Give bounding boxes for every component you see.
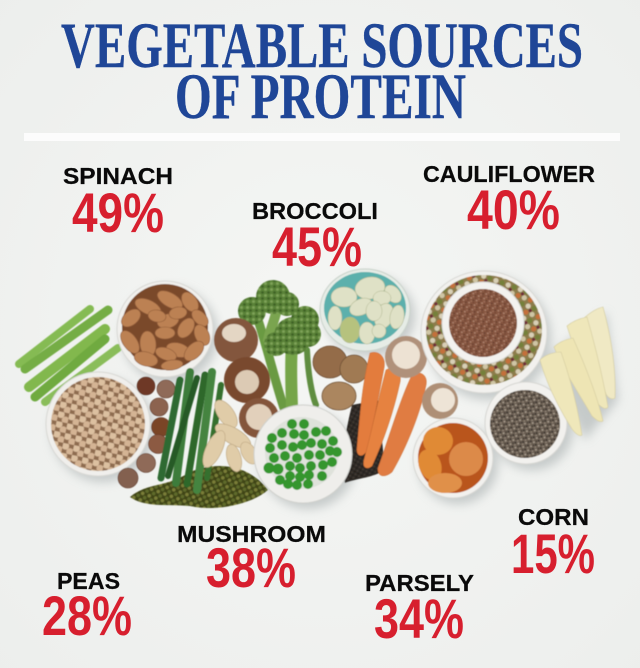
stat: mushroom 38% — [177, 521, 326, 599]
icon: mung beans — [130, 466, 268, 508]
stat: mushroom 38%: MUSHROOM — [177, 521, 326, 547]
stat: broccoli 45%: 45% — [272, 215, 362, 278]
icon: celery sticks — [19, 309, 118, 402]
icon: walnuts — [313, 346, 368, 410]
stat: parsely 34%: 34% — [374, 587, 464, 650]
stat: corn 15% — [511, 504, 595, 585]
stat: corn 15%: CORN — [518, 504, 589, 530]
stat: spinach 49%: 49% — [72, 181, 164, 244]
stat: cauliflower 40%: 40% — [467, 178, 560, 241]
stat: corn 15%: 15% — [511, 522, 595, 585]
stat: cauliflower 40%: CAULIFLOWER — [423, 161, 595, 187]
icon: broad bean bowl — [320, 269, 410, 351]
icon: hazelnuts — [118, 377, 175, 488]
icon: baby corn — [540, 307, 615, 436]
icon: apricot bowl — [413, 418, 493, 498]
icon: peanuts — [198, 396, 261, 473]
stat: spinach 49%: SPINACH — [63, 163, 173, 189]
icon: grains bowl — [421, 271, 547, 393]
icon: peas bowl — [254, 405, 352, 503]
shadows — [51, 275, 618, 509]
icon: black seeds — [343, 400, 385, 483]
stat: peas 28%: PEAS — [57, 568, 120, 594]
stat: broccoli 45% — [252, 198, 378, 278]
title: OF PROTEIN — [175, 61, 466, 133]
stat: broccoli 45%: BROCCOLI — [252, 198, 378, 224]
stat: cauliflower 40% — [423, 161, 595, 241]
food arrangement — [19, 269, 618, 509]
icon: green beans — [161, 372, 221, 490]
icon: almond bowl — [117, 281, 213, 377]
stat: spinach 49% — [63, 163, 173, 244]
title — [61, 10, 583, 133]
icon: chia bowl — [485, 382, 567, 464]
icon: carrots — [357, 352, 426, 476]
stat: parsely 34% — [365, 570, 474, 650]
stat: mushroom 38%: 38% — [206, 536, 296, 599]
icon: broccoli — [238, 280, 321, 412]
stat: peas 28% — [42, 568, 132, 647]
icon: button mushrooms — [385, 336, 458, 419]
stat: parsely 34%: PARSELY — [365, 570, 474, 596]
stat: peas 28%: 28% — [42, 584, 132, 647]
icon: chickpea bowl — [46, 372, 150, 476]
icon: mushrooms — [214, 318, 279, 438]
